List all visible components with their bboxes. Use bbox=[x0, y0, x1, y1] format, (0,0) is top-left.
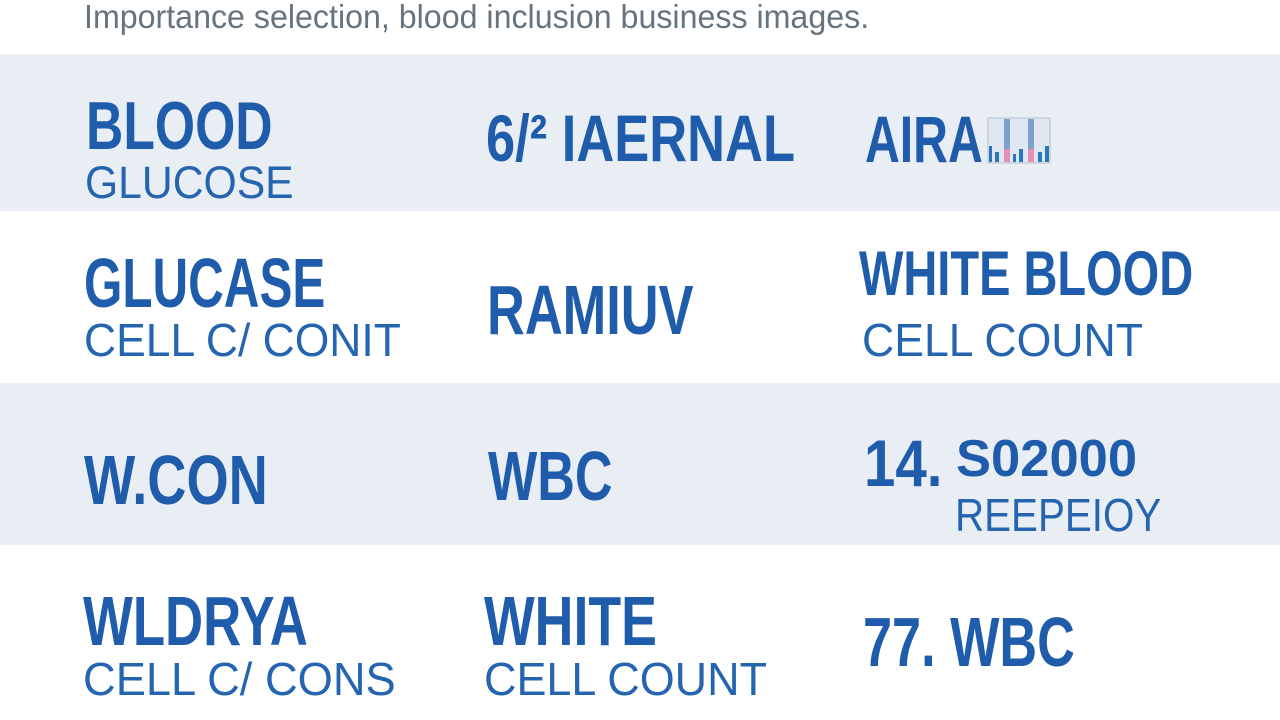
row 1 col 2 heading: 6/² IAERNAL bbox=[486, 101, 795, 175]
row 4 col 2 label: CELL COUNT bbox=[484, 653, 767, 705]
row 3 col 3 blurred value: S02000 bbox=[956, 430, 1137, 488]
row 2 col 1 heading: GLUCASE bbox=[84, 244, 325, 322]
row 3 col 3 label: REEPEIOY bbox=[955, 489, 1161, 541]
row 1 col 1 label: GLUCOSE bbox=[85, 157, 294, 208]
panel: row 1 band bbox=[0, 54, 1280, 211]
row 3 col 2 heading: WBC bbox=[488, 437, 613, 515]
row 1 col 1 heading: BLOOD bbox=[86, 88, 273, 164]
row 2 col 2 heading: RAMIUV bbox=[487, 271, 694, 349]
icon: small bar chart bbox=[988, 118, 1050, 164]
row 4 col 1 label: CELL C/ CONS bbox=[83, 653, 396, 705]
row 4 col 3 heading: 77. WBC bbox=[863, 603, 1075, 681]
row 4 col 1 heading: WLDRYA bbox=[83, 582, 308, 660]
row 3 col 3 number: 14. bbox=[864, 426, 942, 500]
panel: row 3 band bbox=[0, 383, 1280, 545]
row 3 col 1 heading: W.CON bbox=[84, 441, 268, 519]
row 1 col 3 heading: AIRA bbox=[865, 102, 983, 176]
row 2 col 1 label: CELL C/ CONIT bbox=[84, 314, 401, 366]
row 4 col 2 heading: WHITE bbox=[484, 582, 657, 660]
row 2 col 3 heading: WHITE BLOOD bbox=[859, 239, 1193, 309]
row 2 col 3 label: CELL COUNT bbox=[862, 314, 1143, 366]
